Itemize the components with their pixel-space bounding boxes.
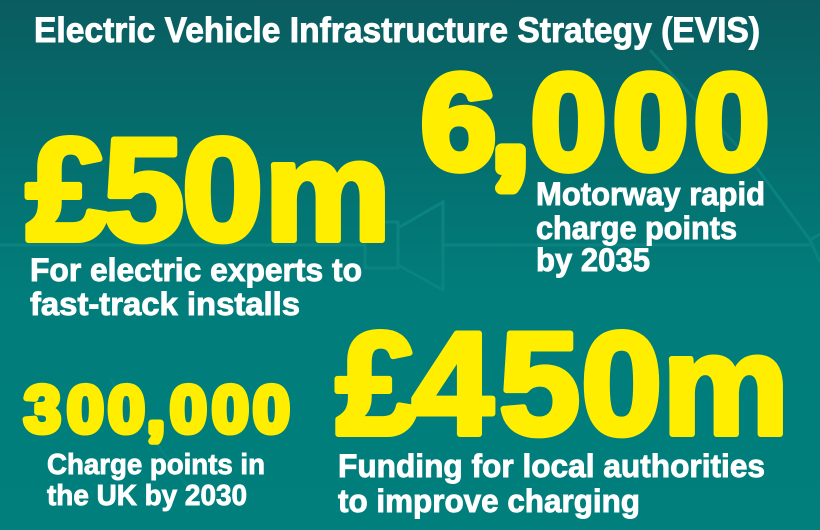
caption: funding for local authorities: to improve charging bbox=[338, 483, 640, 519]
stat: £450m: £450 bbox=[336, 302, 662, 465]
stat: £450m: m bbox=[662, 306, 789, 465]
stat: £50m: m bbox=[264, 112, 391, 271]
title: Electric Vehicle Infrastructure Strategy (EVIS) bbox=[34, 11, 760, 50]
caption: motorway rapid charge points: Motorway rapid bbox=[536, 176, 765, 212]
stat: 300,000: 300 bbox=[24, 372, 145, 446]
caption: motorway rapid charge points bbox=[536, 176, 765, 278]
caption: charge points in the UK: Charge points in bbox=[47, 449, 265, 481]
stat: £50m: £50 bbox=[26, 108, 263, 271]
caption: for electric experts: For electric experts to bbox=[30, 252, 362, 288]
caption: motorway rapid charge points: by 2035 bbox=[536, 242, 650, 278]
caption: funding for local authorities bbox=[338, 448, 765, 519]
stat: 300,000: 000 bbox=[170, 372, 290, 446]
stat: 6,000: 000 bbox=[531, 46, 769, 198]
stat: 6,000: 6 bbox=[421, 46, 496, 198]
caption: for electric experts bbox=[30, 252, 362, 322]
stat: 6,000: , bbox=[493, 56, 528, 196]
caption: motorway rapid charge points: charge points bbox=[536, 210, 737, 246]
caption: funding for local authorities: Funding for local authorities bbox=[338, 448, 765, 484]
caption: charge points in the UK: the UK by 2030 bbox=[47, 480, 247, 512]
stat: 300,000: , bbox=[148, 378, 164, 445]
caption: for electric experts: fast-track installs bbox=[30, 286, 300, 322]
caption: charge points in the UK bbox=[47, 449, 265, 512]
